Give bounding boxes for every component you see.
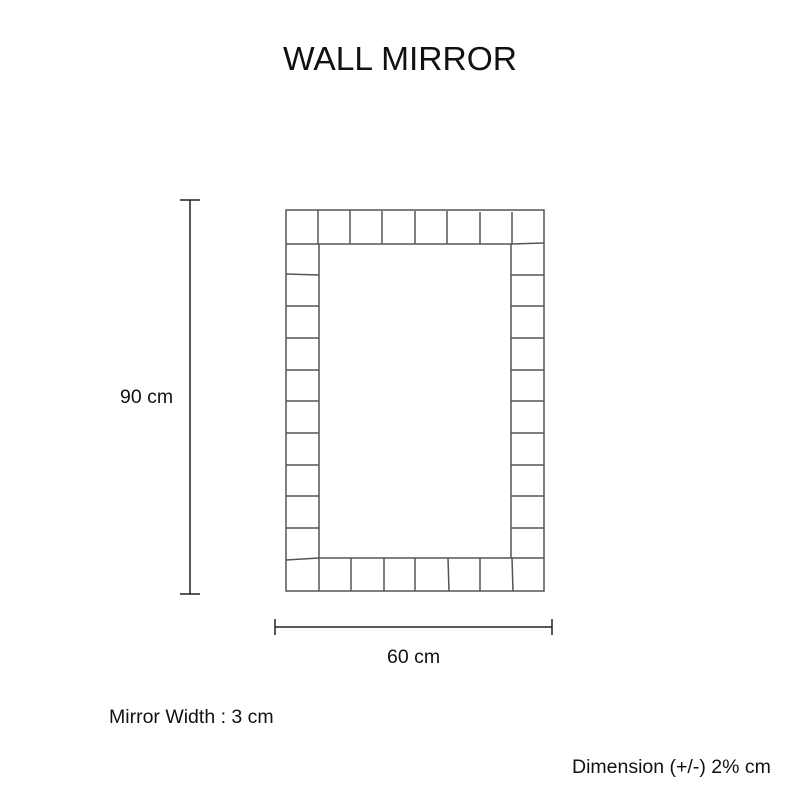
height label: 90 cm <box>120 386 173 408</box>
title: WALL MIRROR <box>283 41 517 78</box>
mirror width note: Mirror Width : 3 cm <box>109 706 274 728</box>
tolerance note: Dimension (+/-) 2% cm <box>572 756 771 778</box>
width dimension line <box>274 619 553 635</box>
width label: 60 cm <box>387 646 440 668</box>
height dimension line <box>180 199 200 595</box>
